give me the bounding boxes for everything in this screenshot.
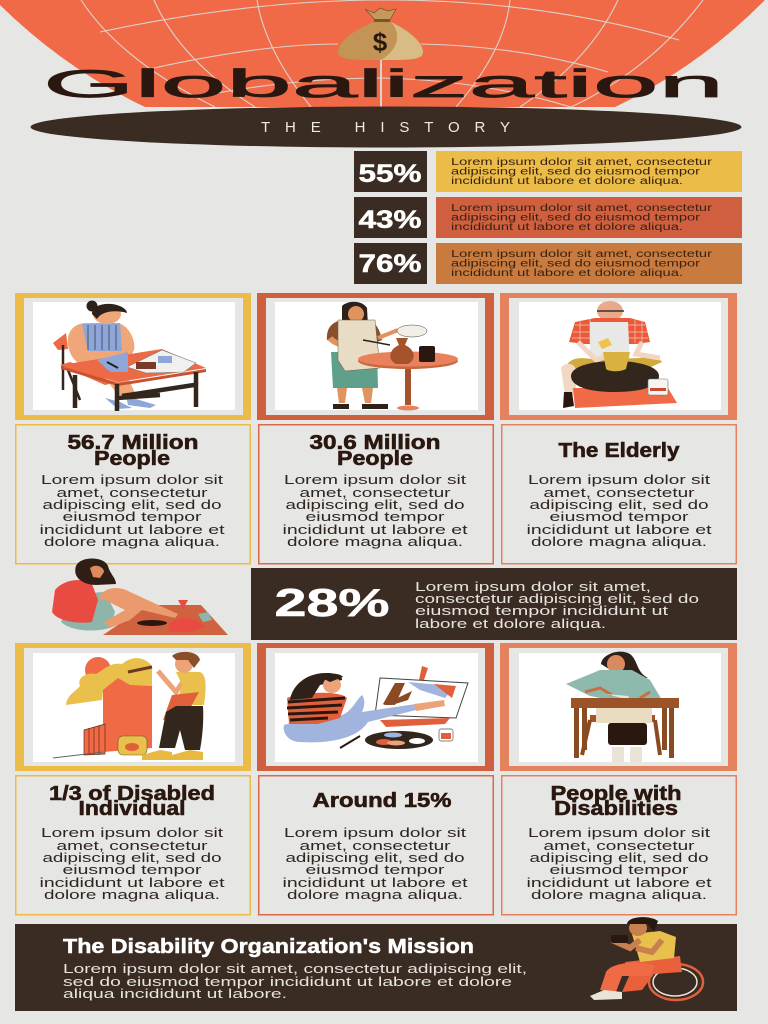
- stat row: 43%: 43%: [358, 206, 422, 234]
- text card: The Elderly: [502, 425, 736, 564]
- stat row: 43%: Lorem ipsum dolor sit amet, consectetur: [451, 203, 713, 214]
- title: Globalization: [43, 63, 724, 106]
- text card: 30.6 Million People: amet, consectetur: [300, 486, 450, 500]
- text card: 56.7 Million People: People: [94, 448, 170, 470]
- text card: 1/3 of Disabled Individual: adipiscing elit, sed do: [42, 851, 222, 865]
- text card: 56.7 Million People: amet, consectetur: [56, 486, 208, 500]
- illustration: seated woman painting on rug: [52, 558, 228, 635]
- text card: People with Disabilities: People with: [550, 783, 682, 805]
- text card: 56.7 Million People: adipiscing elit, sed do: [42, 498, 222, 512]
- text card: People with Disabilities: Lorem ipsum dolor sit: [528, 826, 711, 840]
- mission body text: Lorem ipsum dolor sit amet, consectetur adipiscing elit,: [63, 962, 527, 976]
- globe background: [0, 0, 765, 107]
- mission heading: The Disability Organization's Mission: [63, 936, 474, 958]
- text card: 1/3 of Disabled Individual: dolore magna aliqua.: [44, 888, 220, 902]
- stat row: 76%: 76%: [358, 250, 422, 278]
- text card: Around 15%: dolore magna aliqua.: [287, 888, 463, 902]
- text card: Around 15%: incididunt ut labore et: [282, 876, 468, 890]
- text card: 30.6 Million People: incididunt ut labore et: [282, 523, 468, 537]
- mission band: [15, 924, 737, 1011]
- text card: People with Disabilities: amet, consectetur: [544, 839, 694, 853]
- text card: 30.6 Million People: [259, 425, 493, 564]
- text card: 30.6 Million People: eiusmod tempor: [306, 510, 444, 524]
- dark band: 28%: 28%: [274, 582, 390, 625]
- text card: 1/3 of Disabled Individual: 1/3 of Disabled: [49, 783, 215, 805]
- banner: the history: [30, 106, 742, 148]
- image frame: potter: [500, 293, 737, 420]
- stat row: 43%: incididunt ut labore et dolore aliqua.: [451, 222, 683, 233]
- text card: Around 15%: Lorem ipsum dolor sit: [284, 826, 467, 840]
- text card: The Elderly: dolore magna aliqua.: [531, 535, 707, 549]
- dark band: 28%: consectetur adipiscing elit, sed do: [415, 592, 699, 606]
- text card: People with Disabilities: adipiscing elit, sed do: [530, 851, 709, 865]
- image frame: wall painter: [15, 643, 251, 771]
- text card: Around 15%: amet, consectetur: [300, 839, 450, 853]
- mission body text: sed do eiusmod tempor incididunt ut labore et dolore: [63, 975, 512, 989]
- mission body text: aliqua incididunt ut labore.: [63, 987, 287, 1001]
- text card: 56.7 Million People: [16, 425, 250, 564]
- icon: money bag: $: [373, 27, 388, 57]
- image frame: sewing woman: [15, 293, 251, 420]
- image frame: canvas artist: [257, 643, 494, 771]
- text card: The Elderly: The Elderly: [558, 440, 680, 462]
- text card: 56.7 Million People: incididunt ut labore et: [40, 523, 225, 537]
- text card: Around 15%: [259, 776, 493, 915]
- text card: 30.6 Million People: adipiscing elit, sed do: [286, 498, 465, 512]
- text card: 30.6 Million People: Lorem ipsum dolor sit: [284, 473, 467, 487]
- image frame: woman at desk: [500, 643, 737, 771]
- mission body text: [63, 962, 527, 1001]
- image frame: vase painter: [257, 293, 494, 420]
- text card: 56.7 Million People: 56.7 Million: [68, 432, 198, 454]
- text card: 1/3 of Disabled Individual: incididunt ut labore et: [40, 876, 225, 890]
- stat row: 55%: [354, 151, 742, 192]
- dark band: 28%: labore et dolore aliqua.: [415, 617, 606, 631]
- text card: People with Disabilities: eiusmod tempor: [550, 863, 688, 877]
- text card: 1/3 of Disabled Individual: Individual: [78, 798, 186, 820]
- text card: Around 15%: eiusmod tempor: [306, 863, 444, 877]
- dark band: 28%: [251, 568, 737, 640]
- dark band: 28%: Lorem ipsum dolor sit amet,: [415, 580, 651, 594]
- text card: People with Disabilities: [502, 776, 736, 915]
- text card: Around 15%: adipiscing elit, sed do: [286, 851, 465, 865]
- stat row: 76%: Lorem ipsum dolor sit amet, consectetur: [451, 249, 713, 260]
- icon: money bag: [338, 8, 423, 60]
- text card: People with Disabilities: dolore magna aliqua.: [531, 888, 707, 902]
- text card: 30.6 Million People: 30.6 Million: [310, 432, 440, 454]
- text card: 30.6 Million People: dolore magna aliqua.: [287, 535, 463, 549]
- stat row: 55%: adipiscing elit, sed do eiusmod tempor: [451, 166, 701, 178]
- illustration: photographer in wheelchair: [590, 917, 703, 1000]
- text card: The Elderly: amet, consectetur: [544, 486, 694, 500]
- stat row: 76%: [354, 243, 742, 284]
- text card: The Elderly: adipiscing elit, sed do: [530, 498, 709, 512]
- text card: 1/3 of Disabled Individual: eiusmod tempor: [62, 863, 202, 877]
- text card: Around 15%: Around 15%: [312, 790, 452, 812]
- text card: The Elderly: incididunt ut labore et: [526, 523, 712, 537]
- banner: the history: THE HISTORY: [261, 119, 510, 136]
- stat row: 55%: 55%: [358, 160, 422, 188]
- text card: 1/3 of Disabled Individual: amet, consectetur: [56, 839, 208, 853]
- text card: 1/3 of Disabled Individual: [16, 776, 250, 915]
- dark band: 28%: eiusmod tempor incididunt ut: [415, 604, 669, 618]
- text card: 1/3 of Disabled Individual: Lorem ipsum dolor sit: [41, 826, 224, 840]
- text card: People with Disabilities: incididunt ut labore et: [526, 876, 712, 890]
- text card: 56.7 Million People: eiusmod tempor: [62, 510, 202, 524]
- text card: The Elderly: eiusmod tempor: [550, 510, 688, 524]
- stat row: 43%: adipiscing elit, sed do eiusmod tempor: [451, 212, 701, 224]
- text card: 56.7 Million People: dolore magna aliqua.: [44, 535, 220, 549]
- stat row: 76%: adipiscing elit, sed do eiusmod tempor: [451, 258, 701, 270]
- text card: 30.6 Million People: People: [337, 448, 413, 470]
- stat row: 76%: incididunt ut labore et dolore aliqua.: [451, 268, 683, 279]
- text card: People with Disabilities: Disabilities: [554, 798, 678, 820]
- stat row: 43%: [354, 197, 742, 238]
- stat row: 55%: incididunt ut labore et dolore aliqua.: [451, 176, 683, 187]
- stat row: 55%: Lorem ipsum dolor sit amet, consectetur: [451, 157, 713, 168]
- text card: 56.7 Million People: Lorem ipsum dolor sit: [41, 473, 224, 487]
- text card: The Elderly: Lorem ipsum dolor sit: [528, 473, 711, 487]
